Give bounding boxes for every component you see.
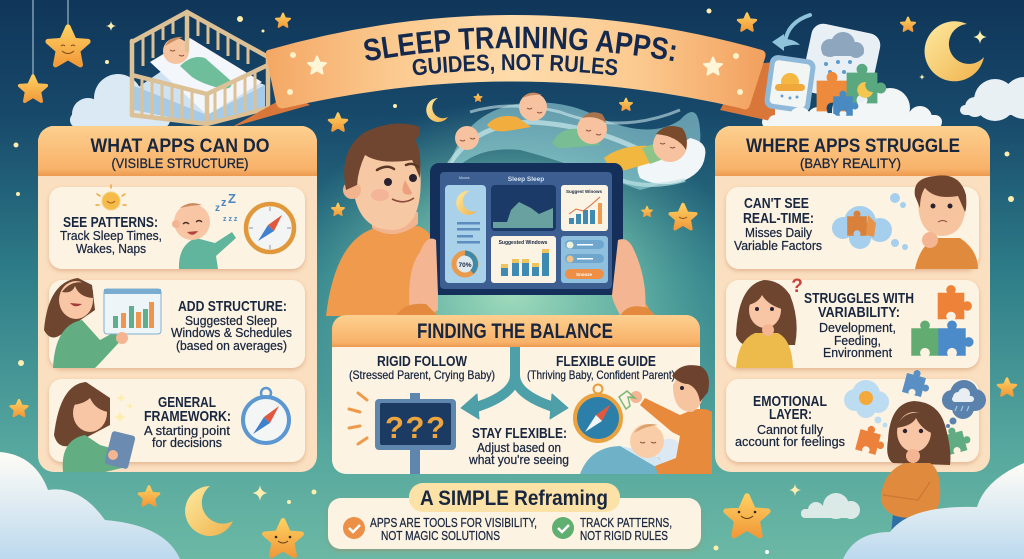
icon: thought cloud with puzzle [832, 193, 908, 250]
icon: small puzzles [855, 368, 973, 456]
right panel header: WHERE APPS STRUGGLE [746, 136, 960, 157]
card: add structure: (based on averages) [176, 338, 287, 353]
moon: top right [925, 21, 984, 81]
panel: where apps struggle [715, 126, 990, 472]
icon: storm thought cloud [942, 380, 986, 428]
left dashboard panel [445, 185, 486, 283]
panel: what apps can do [38, 126, 317, 472]
card: can't see real-time: REAL-TIME: [743, 210, 814, 227]
panel: a simple reframing [328, 483, 701, 549]
panel: finding the balance [332, 315, 712, 474]
icon: sun [96, 185, 126, 210]
card: general framework: FRAMEWORK: [144, 408, 231, 425]
card: add structure: ADD STRUCTURE: [178, 298, 287, 315]
tablet dashboard: Sleep Sleep [508, 176, 544, 183]
sleep chart panel [491, 185, 556, 231]
hands holding tablet [396, 238, 656, 316]
star with face: bottom right [726, 496, 768, 536]
card: add structure: Windows & Schedules [171, 325, 292, 340]
right panel header: (BABY REALITY) [800, 155, 901, 171]
left dashboard panel: 70% [458, 262, 472, 269]
panel: finding the balance: RIGID FOLLOW [377, 353, 468, 370]
right panel header [715, 126, 990, 176]
card: struggles with variability: Environment [823, 345, 892, 360]
panel: finding the balance: what you're seeing [468, 452, 569, 467]
card: general framework: A starting point [144, 423, 230, 438]
controls panel [561, 236, 608, 283]
icon: happy baby with zzz: z z z [223, 216, 238, 223]
suggest windows card [561, 185, 608, 231]
card: struggles with variability: VARIABILITY: [818, 304, 900, 321]
tablet dashboard [430, 163, 623, 295]
panel: finding the balance: FLEXIBLE GUIDE [556, 353, 656, 370]
icon: question mark: ? [791, 276, 803, 297]
icon: woman with tablet [54, 382, 136, 472]
tablet dashboard: Moons [459, 176, 470, 180]
baby three [552, 112, 607, 148]
baby four on cloud [604, 126, 705, 184]
icon: puzzle pieces [911, 285, 974, 356]
icon: blue compass [243, 388, 289, 443]
card: general framework: GENERAL [158, 394, 216, 411]
baby two [487, 93, 547, 131]
icon: worried mom [736, 280, 797, 368]
card: can't see real-time: Variable Factors [734, 238, 822, 253]
card: struggles with variability [726, 276, 979, 368]
panel: a simple reframing: NOT RIGID RULES [580, 529, 668, 543]
figure: thoughtful woman [881, 401, 950, 535]
reframing pill: A SIMPLE Reframing [420, 487, 608, 510]
card: emotional layer: account for feelings [735, 434, 845, 449]
suggested windows chart [491, 236, 556, 283]
card: struggles with variability: STRUGGLES WITH [804, 290, 914, 307]
icon: happy baby with zzz [172, 191, 238, 269]
moon: small [426, 98, 448, 122]
cloud: bottom right [843, 463, 1024, 559]
icon: worried dad [915, 175, 978, 269]
cloud: bottom left [0, 452, 180, 559]
card: struggles with variability: Feeding, [834, 333, 881, 348]
icon: happy baby with zzz: z [215, 203, 220, 214]
icon: woman presenting chart [44, 278, 161, 368]
arrows: split paths [461, 347, 568, 419]
panel: a simple reframing: APPS ARE TOOLS FOR VISIBILITY, [370, 516, 537, 530]
moon: bottom [185, 486, 233, 536]
card: emotional layer: Cannot fully [757, 422, 823, 437]
baby one [455, 126, 479, 150]
figure: dad and sleeping baby [580, 365, 712, 474]
icon: green check [552, 517, 574, 539]
controls panel: Snooze [576, 272, 592, 277]
title text: SLEEP TRAINING APPS: [364, 26, 676, 62]
star with face: right of tablet [670, 204, 696, 229]
card: see patterns: SEE PATTERNS: [63, 214, 158, 231]
clouds [70, 74, 1024, 519]
card: can't see real-time: CAN'T SEE [744, 195, 809, 212]
icon: gold compass [246, 204, 294, 252]
card: emotional layer: EMOTIONAL [753, 393, 827, 410]
icon: question sign: ??? [385, 410, 445, 445]
panel: a simple reframing: TRACK PATTERNS, [580, 516, 672, 530]
panel: finding the balance: STAY FLEXIBLE: [472, 425, 567, 442]
crib with sleeping baby [132, 12, 268, 125]
card: see patterns [49, 185, 305, 269]
left panel header: (VISIBLE STRUCTURE) [112, 155, 248, 171]
card: add structure [44, 278, 305, 368]
card: see patterns: Wakes, Naps [76, 241, 146, 256]
suggest windows card: Suggest Winows [566, 189, 602, 194]
dad holding tablet [326, 123, 650, 316]
balance heading: FINDING THE BALANCE [417, 320, 613, 343]
panel: finding the balance: (Stressed Parent, Crying Baby) [349, 368, 495, 382]
card: emotional layer: LAYER: [769, 406, 812, 423]
card: general framework: for decisions [152, 435, 222, 450]
card: can't see real-time [726, 175, 979, 269]
chart window [104, 289, 161, 334]
swirl of sleeping babies [446, 93, 705, 190]
icon: teal compass [575, 384, 621, 441]
card: add structure: Suggested Sleep [185, 313, 277, 328]
left panel header [38, 126, 317, 176]
left panel header: WHAT APPS CAN DO [90, 136, 270, 157]
icon: happy baby with zzz: Z [228, 191, 236, 206]
panel: finding the balance: Adjust based on [477, 440, 561, 455]
suggested windows chart: Suggested Windows [499, 240, 548, 246]
subtitle text: GUIDES, NOT RULES [412, 54, 618, 76]
card: general framework [49, 379, 305, 472]
icon: happy baby with zzz: z [221, 197, 227, 209]
card: emotional layer [726, 379, 979, 462]
icon: orange check [343, 517, 365, 539]
banner tails [232, 62, 775, 127]
card: struggles with variability: Development, [819, 320, 896, 335]
icon: question sign [349, 393, 456, 474]
card: can't see real-time: Misses Daily [745, 225, 812, 240]
panel: finding the balance: (Thriving Baby, Confident Parent) [527, 368, 675, 382]
panel: a simple reframing: NOT MAGIC SOLUTIONS [381, 529, 500, 543]
title banner [266, 15, 766, 110]
icon: sun thought cloud [844, 380, 889, 428]
card: see patterns: Track Sleep Times, [60, 228, 162, 243]
weather and puzzle icons [763, 15, 886, 131]
star with face: bottom centre [264, 520, 302, 556]
